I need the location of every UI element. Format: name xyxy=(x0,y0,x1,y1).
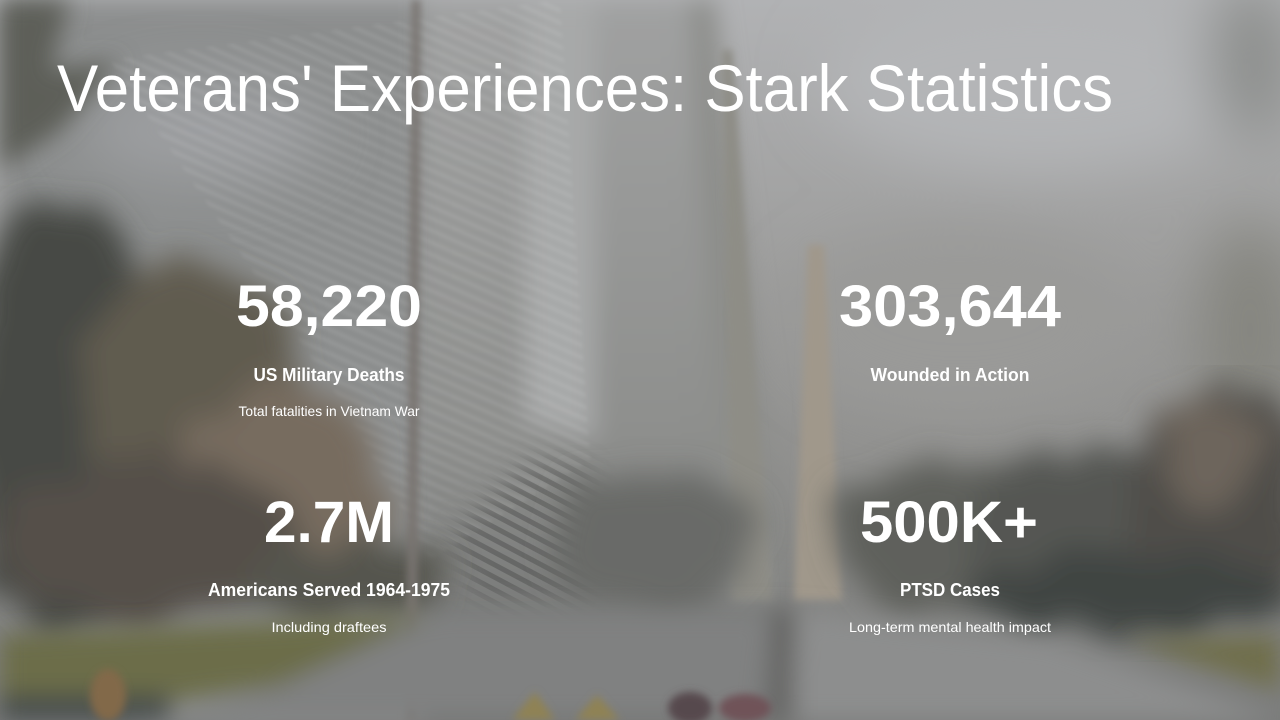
stat card: wounded in action xyxy=(839,274,1061,385)
stat label: US Military Deaths: US Military Deaths xyxy=(254,365,404,385)
stat label: Americans Served 1964-1975: Americans Served 1964-1975 xyxy=(208,580,450,600)
stat label: Wounded in Action: Wounded in Action xyxy=(870,365,1030,385)
foreground tributes xyxy=(90,669,771,720)
stat note: total fatalities: Total fatalities in Vietnam War xyxy=(238,403,420,419)
ground and grass xyxy=(0,610,1280,720)
left tree mass xyxy=(0,200,450,640)
stat card: Americans served xyxy=(208,490,450,635)
distant trees xyxy=(565,390,1280,637)
top-left branches xyxy=(0,0,120,170)
stat card: PTSD cases xyxy=(849,490,1051,635)
stat number: 303,644: 303,644 xyxy=(839,274,1061,339)
stat card: US military deaths xyxy=(236,274,422,419)
stat number: 500K+: 500K+ xyxy=(860,490,1038,555)
stat number: 2.7M: 2.7M xyxy=(264,490,394,555)
stat note: including draftees: Including draftees xyxy=(272,619,386,635)
names pattern on wall xyxy=(110,0,590,560)
stat number: 58,220: 58,220 xyxy=(236,274,422,339)
title: Veterans' Experiences: Stark Statistics xyxy=(57,51,1113,125)
stat label: PTSD Cases: PTSD Cases xyxy=(900,580,1000,600)
stat note: long-term impact: Long-term mental health impact xyxy=(849,619,1051,635)
